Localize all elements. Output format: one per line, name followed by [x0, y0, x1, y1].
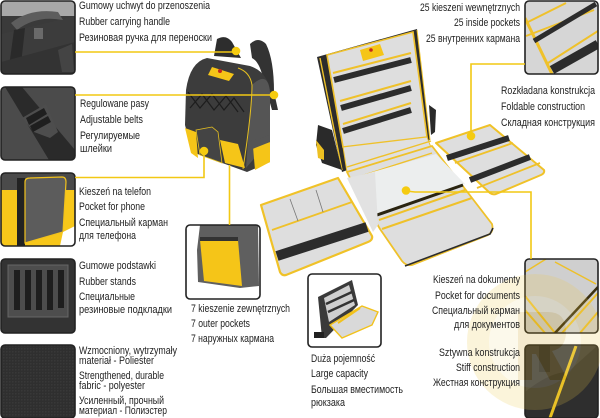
open backpack: right flap — [436, 125, 544, 194]
callout: handle — [75, 47, 240, 55]
thumbnail: document pocket — [525, 259, 598, 333]
logo patch — [360, 44, 384, 61]
text: inside pockets: 25 kieszeni wewnętrznych — [420, 2, 520, 14]
text: outer pockets: 7 kieszenie zewnętrznych — [191, 303, 290, 315]
text: outer pockets — [191, 303, 290, 345]
thumbnail: stiff construction — [525, 345, 598, 418]
text: belts — [80, 98, 149, 155]
text: documents: Kieszeń na dokumenty — [433, 274, 520, 286]
text: stiff construction: Жестная конструкция — [433, 377, 520, 389]
text: stiff construction: Stiff construction — [456, 362, 520, 374]
text: fabric: Wzmocniony, wytrzymały — [79, 345, 177, 357]
bottom pockets — [185, 128, 198, 158]
text: capacity: Large capacity — [311, 368, 368, 380]
text: documents: Pocket for documents — [435, 290, 520, 302]
open backpack: floor and centre flap — [343, 137, 493, 266]
logo patch — [208, 67, 234, 81]
callout: belts — [75, 91, 278, 99]
text: fabric: материал - Полиэстер — [79, 405, 167, 417]
text: belts: шлейки — [80, 143, 112, 155]
text: outer pockets: 7 наружных кармана — [191, 333, 275, 345]
text: documents: для документов — [454, 319, 520, 331]
text: handle: Gumowy uchwyt do przenoszenia — [79, 0, 211, 12]
side pockets — [316, 125, 342, 170]
text: documents — [432, 274, 520, 331]
text: phone pocket: Специальный карман — [79, 217, 168, 229]
text: fabric: materiał - Poliester — [79, 355, 154, 367]
text: rubber stands — [79, 260, 172, 316]
text: fabric: Strengthened, durable — [79, 370, 164, 382]
text: phone pocket: Kieszeń na telefon — [79, 186, 151, 198]
text: fabric — [79, 345, 177, 417]
text: documents: Специальный карман — [432, 305, 520, 317]
open backpack: back panel — [316, 29, 436, 172]
text: capacity: Duża pojemność — [311, 353, 375, 365]
elastic cords — [188, 92, 244, 112]
thumbnail: rubber handle — [1, 1, 75, 74]
text: belts: Regulowane pasy — [80, 98, 149, 110]
text: capacity: Большая вместимость — [311, 384, 403, 396]
shoulder straps — [214, 37, 241, 58]
text: stiff construction: Sztywna konstrukcja — [439, 347, 521, 359]
text: handle — [79, 0, 212, 44]
thumbnail: adjustable belts — [2, 88, 74, 160]
watermark seal — [467, 274, 600, 410]
callout: phone pocket — [75, 147, 208, 178]
inner pocket stripes — [333, 53, 411, 124]
text: inside pockets — [420, 2, 521, 45]
text: handle: Резиновая ручка для переноски — [79, 32, 212, 44]
text: belts: Регулируемые — [80, 130, 140, 142]
thumbnail: polyester fabric — [1, 345, 75, 418]
thumbnail: large capacity — [314, 280, 379, 339]
thumbnail: inside pockets — [525, 1, 598, 74]
thumbnail: phone pocket — [1, 173, 75, 246]
backpack front view — [185, 37, 278, 172]
text: inside pockets: 25 inside pockets — [454, 17, 520, 29]
callout: outer pockets — [228, 165, 230, 225]
text: foldable — [501, 85, 596, 129]
thumbnail: rubber stands — [1, 259, 75, 333]
text: belts: Adjustable belts — [80, 114, 143, 126]
text: phone pocket — [79, 186, 168, 242]
text: rubber stands: резиновые подкладки — [79, 304, 172, 316]
body — [185, 58, 270, 172]
text: stiff construction — [433, 347, 521, 389]
text: rubber stands: Rubber stands — [79, 276, 136, 288]
text: phone pocket: Pocket for phone — [79, 201, 145, 213]
text: rubber stands: Gumowe podstawki — [79, 260, 156, 272]
text: fabric: Усиленный, прочный — [79, 395, 164, 407]
text: capacity — [311, 353, 403, 409]
text: outer pockets: 7 outer pockets — [191, 318, 250, 330]
text: phone pocket: для телефона — [79, 230, 137, 242]
open backpack: left flap — [261, 172, 378, 275]
callout: documents — [402, 186, 531, 259]
text: handle: Rubber carrying handle — [79, 16, 170, 28]
thumbnail: outer pocket — [197, 226, 259, 288]
callout: foldable — [467, 64, 525, 140]
text: fabric: fabric - polyester — [79, 380, 145, 392]
text: inside pockets: 25 внутренних кармана — [426, 33, 521, 45]
text: rubber stands: Специальные — [79, 291, 135, 303]
text: capacity: рюкзака — [311, 397, 346, 409]
